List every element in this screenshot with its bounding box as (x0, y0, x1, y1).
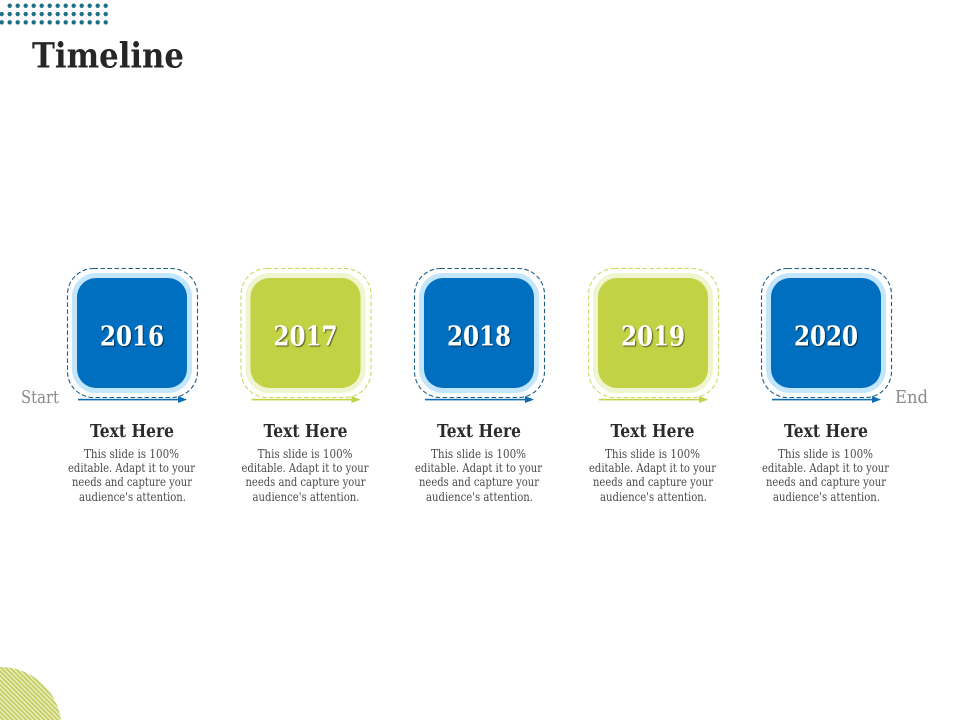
decorative hatched corner circle (0, 667, 61, 720)
description 2018: This slide is 100% (431, 447, 526, 461)
description 2020: editable. Adapt it to your (762, 461, 889, 475)
dashed outline 2018 (414, 268, 544, 398)
arrow 2020 (772, 396, 881, 403)
year label 2017: 2017 (274, 322, 338, 352)
title: Timeline (32, 36, 184, 76)
year label 2018: 2018 (447, 322, 511, 352)
heading 2019: Text Here (610, 422, 694, 442)
description 2019: editable. Adapt it to your (589, 461, 716, 475)
description 2020 (762, 447, 889, 504)
year tile 2018 (424, 278, 534, 388)
milestone 2018 (414, 268, 544, 504)
description 2017: This slide is 100% (258, 447, 352, 461)
description 2017 (242, 447, 369, 504)
description 2018 (415, 447, 542, 504)
description 2016: editable. Adapt it to your (68, 461, 195, 475)
milestone 2020 (762, 268, 892, 504)
description 2019 (589, 447, 716, 504)
arrow 2019 (599, 396, 708, 403)
description 2019: needs and capture your (593, 475, 713, 489)
year tile 2016 (77, 278, 187, 388)
arrow 2017 (252, 396, 360, 403)
description 2017: audience's attention. (252, 490, 360, 504)
year label 2020: 2020 (794, 322, 858, 352)
description 2020: needs and capture your (766, 475, 886, 489)
description 2017: editable. Adapt it to your (242, 461, 369, 475)
heading 2017: Text Here (264, 422, 348, 442)
description 2016: audience's attention. (79, 490, 186, 504)
year tile 2019 (598, 278, 708, 388)
dashed outline 2016 (68, 268, 198, 398)
year label 2016: 2016 (100, 322, 164, 352)
arrow 2016 (78, 396, 187, 403)
end label: End (895, 387, 928, 408)
description 2018: editable. Adapt it to your (415, 461, 542, 475)
heading 2016: Text Here (90, 422, 174, 442)
milestone 2016 (68, 268, 198, 504)
milestone 2017 (241, 268, 371, 504)
year tile 2017 (250, 278, 360, 388)
heading 2018: Text Here (437, 422, 521, 442)
dashed outline 2017 (241, 268, 371, 398)
description 2016 (68, 447, 195, 504)
year tile 2020 (771, 278, 881, 388)
description 2020: audience's attention. (773, 490, 880, 504)
arrow 2018 (425, 396, 534, 403)
dashed outline 2019 (588, 268, 718, 398)
decorative dot grid (0, 2, 108, 27)
description 2017: needs and capture your (246, 475, 366, 489)
heading 2020: Text Here (784, 422, 868, 442)
dashed outline 2020 (762, 268, 892, 398)
milestone 2019 (588, 268, 718, 504)
description 2020: This slide is 100% (778, 447, 873, 461)
description 2019: audience's attention. (600, 490, 707, 504)
description 2018: audience's attention. (426, 490, 533, 504)
description 2016: needs and capture your (72, 475, 192, 489)
description 2019: This slide is 100% (605, 447, 700, 461)
description 2018: needs and capture your (419, 475, 539, 489)
year label 2019: 2019 (621, 322, 685, 352)
description 2016: This slide is 100% (84, 447, 179, 461)
start label: Start (21, 387, 60, 408)
